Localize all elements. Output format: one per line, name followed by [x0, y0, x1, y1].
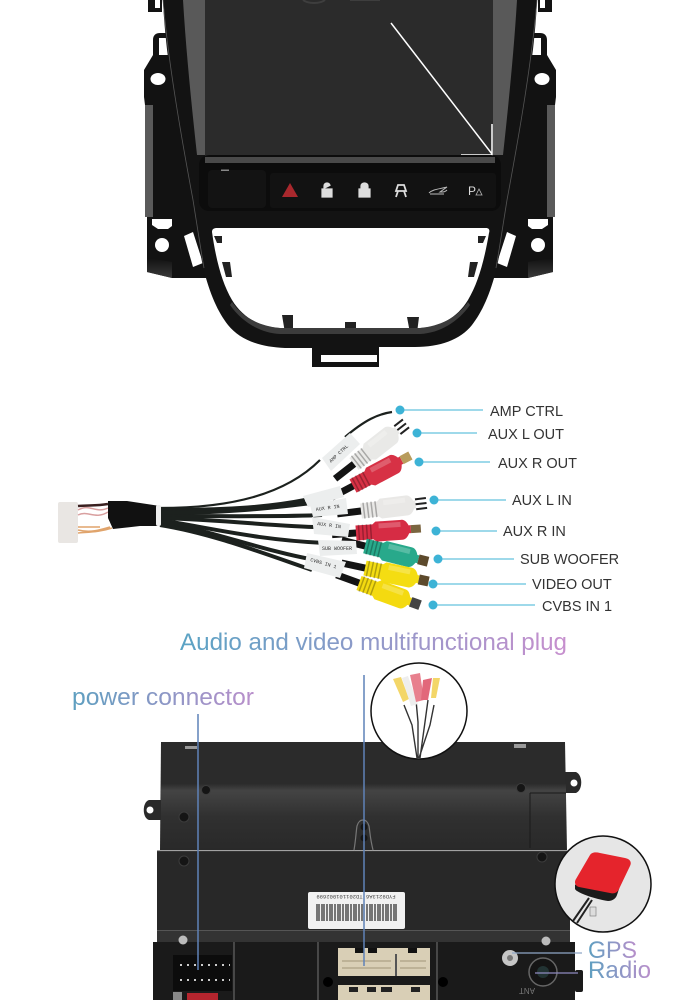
callout: AUX L IN: AUX L IN — [512, 493, 572, 509]
lower case — [157, 851, 570, 931]
callout: AUX L OUT: AUX L OUT — [488, 427, 564, 443]
label: GPS: GPS — [588, 937, 637, 964]
oval fixings — [328, 977, 443, 987]
bezel seam — [163, 0, 537, 268]
panel: dashboard bezel with screen — [144, 0, 556, 367]
callout: AUX R IN: AUX R IN — [503, 524, 566, 540]
callout: CVBS IN 1 — [428, 599, 612, 615]
wire label text: CVBS IN 1 — [309, 557, 337, 570]
wire label text — [309, 444, 352, 570]
label: Radio: Radio — [588, 957, 651, 984]
bezel frame — [163, 0, 537, 367]
coloured leads — [78, 508, 108, 515]
blank switch — [208, 170, 266, 208]
heading: audio and video plug: Audio and video multifunctional plug — [180, 629, 567, 656]
pointer: AV plug — [363, 675, 365, 966]
pointer: power connector — [197, 714, 199, 970]
inner trim clips — [214, 236, 486, 333]
barcode label: FYD9213A6 TD201101002699 — [316, 893, 396, 900]
AV socket — [338, 948, 430, 976]
callouts: cable pin labels — [396, 404, 619, 615]
top notches — [185, 744, 526, 749]
bottom clip opening — [321, 355, 377, 362]
callout: AUX R IN — [432, 524, 566, 540]
ear: right — [565, 772, 581, 793]
connector panel — [153, 942, 575, 1000]
wire labels — [303, 433, 360, 578]
icon: stability — [396, 185, 406, 197]
wires — [160, 412, 392, 570]
callout: AUX L OUT — [412, 427, 564, 443]
icon: unlock — [322, 183, 332, 197]
rear seam strip — [157, 930, 570, 942]
pointer: Radio — [535, 972, 578, 974]
bracket: right mount — [490, 0, 556, 278]
callout: AUX R OUT: AUX R OUT — [498, 456, 577, 472]
panel seam — [530, 793, 566, 848]
pointer: GPS — [512, 952, 582, 954]
plug: AUX R OUT red — [327, 447, 415, 506]
upper case — [160, 742, 567, 850]
port marking: ANT — [519, 986, 535, 995]
silver screws — [178, 936, 188, 944]
ear: left — [144, 800, 161, 820]
callout: AUX L IN — [430, 493, 572, 509]
annotation arrow — [391, 23, 492, 155]
panel: head unit rear — [144, 675, 583, 1000]
icon: hazard — [282, 183, 298, 197]
callout: VIDEO OUT: VIDEO OUT — [532, 577, 612, 593]
callout: SUB WOOFER — [434, 552, 619, 568]
radio port — [529, 958, 557, 986]
icon: car — [429, 187, 447, 194]
plug: AUX L OUT white — [329, 415, 412, 487]
plug: AUX R IN red — [331, 518, 422, 545]
button bar — [199, 155, 501, 211]
wire label text: AUX R IN — [317, 521, 341, 530]
screen logo fragment — [303, 0, 380, 3]
side trim — [183, 0, 517, 155]
callout: AMP CTRL: AMP CTRL — [490, 404, 563, 420]
heading: power connector: power connector — [72, 684, 254, 711]
icon: park sensor — [476, 189, 482, 195]
bracket: left mount — [144, 0, 210, 278]
second socket — [338, 985, 430, 1000]
inset: RCA plugs circle — [371, 663, 467, 759]
screen — [205, 0, 493, 156]
inset: GPS antenna circle — [555, 836, 651, 932]
plug connector — [58, 502, 78, 543]
barcode label — [308, 892, 405, 929]
plug: CVBS IN 1 yellow — [333, 565, 424, 615]
screws — [179, 784, 547, 866]
lower opening — [212, 228, 489, 328]
wire label text: AMP CTRL — [328, 444, 350, 464]
keyhole — [354, 820, 373, 850]
callout: AUX R OUT — [414, 456, 577, 472]
plug: VIDEO OUT yellow — [339, 553, 431, 591]
callout: CVBS IN 1: CVBS IN 1 — [542, 599, 612, 615]
heat shrink — [108, 501, 160, 529]
plug: AUX L IN white — [336, 493, 428, 524]
diagram: RCA cable harness — [58, 412, 431, 615]
cable tie — [156, 505, 161, 526]
callout: VIDEO OUT — [428, 577, 612, 593]
callout: SUB WOOFER: SUB WOOFER — [520, 552, 619, 568]
wire label text: AUX R IN — [315, 504, 340, 513]
power socket — [173, 955, 232, 1000]
text: park button: P — [468, 184, 476, 198]
plug: SUB WOOFER green — [339, 530, 430, 571]
raised band — [161, 784, 566, 850]
callout: AMP CTRL — [396, 404, 563, 420]
icon: lock — [359, 183, 370, 197]
GPS port — [502, 950, 518, 966]
wire label text: SUB WOOFER — [322, 546, 352, 552]
side tab — [575, 970, 583, 992]
